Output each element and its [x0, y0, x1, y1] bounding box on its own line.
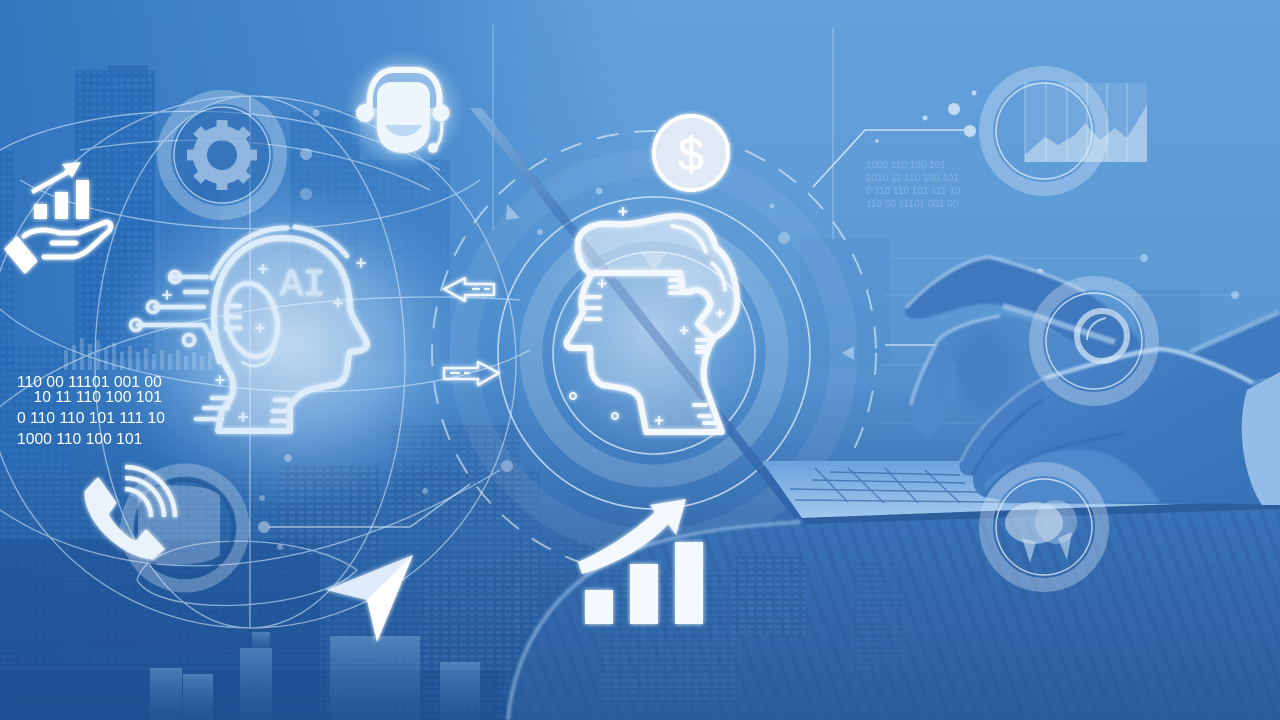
- icon: circle target: [1036, 283, 1152, 399]
- icon: growth bar chart: [578, 499, 703, 624]
- icon: headset agent: [344, 50, 464, 170]
- faint binary text: [866, 160, 961, 210]
- rings around human head: [432, 131, 876, 575]
- icon: circle with chart: [986, 73, 1147, 189]
- faint data bars: [64, 338, 212, 370]
- icon: phone: [86, 467, 175, 558]
- panel: laptop and desk: [470, 108, 1280, 720]
- near hand: [960, 349, 1253, 504]
- glow behind AI head: [100, 175, 490, 515]
- guide lines and dots: [258, 25, 1280, 554]
- icon: paper plane: [326, 555, 413, 642]
- binary code text: 0 110 110 101 111 10: [17, 410, 165, 427]
- keyboard: [790, 468, 1095, 503]
- laptop base: [762, 461, 1207, 518]
- faint binary text: 0010 11 110 100 101: [866, 173, 959, 184]
- faint binary text: 110 00 11101 001 00: [866, 199, 959, 210]
- icon: ring around phone: [127, 470, 243, 586]
- shirt cuff: [1242, 372, 1280, 505]
- globe wireframe: [0, 96, 530, 628]
- icons: glowing white: [6, 50, 737, 642]
- icon: human head: [567, 208, 737, 432]
- icon: dollar coin: $: [678, 128, 704, 180]
- glow behind human head: [539, 205, 769, 455]
- far hand: [905, 257, 1142, 458]
- icon: dollar coin: [654, 116, 728, 190]
- binary code text: [17, 374, 165, 448]
- icon: gear in ring: [164, 97, 280, 213]
- label: AI: AI: [280, 264, 326, 307]
- binary code text: 1000 110 100 101: [17, 431, 142, 448]
- binary code text: 110 00 11101 001 00: [17, 374, 162, 391]
- icon: arrow left: [444, 278, 494, 301]
- icon: arrow right: [444, 362, 499, 385]
- icon: hand with growth chart: [6, 162, 111, 272]
- laptop screen edge: [470, 108, 804, 519]
- faint binary text: 0 110 110 101 111 10: [866, 186, 961, 197]
- binary code text: 10 11 110 100 101: [33, 389, 162, 406]
- icon: circle with speech bubbles: [986, 469, 1102, 585]
- back arm: [1187, 310, 1280, 382]
- icon: AI head: [130, 227, 367, 431]
- faint binary text: 1000 110 100 101: [866, 160, 946, 171]
